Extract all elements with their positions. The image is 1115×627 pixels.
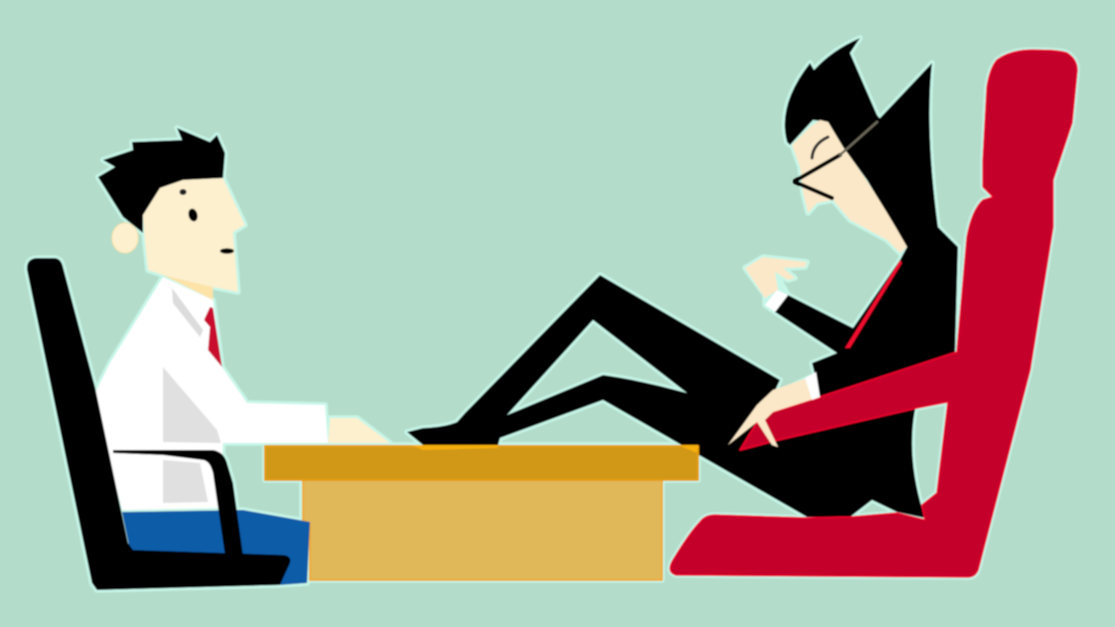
employee upper body and head — [93, 128, 390, 510]
devil boss body and legs — [407, 63, 958, 518]
employee chair armrest — [113, 450, 243, 555]
shirt collar shadow — [172, 288, 203, 337]
employee face — [143, 178, 245, 292]
desk base — [303, 480, 662, 580]
desk corner highlight — [678, 445, 698, 453]
employee chair back and seat — [27, 258, 290, 590]
employee ear — [112, 223, 138, 253]
desk — [265, 445, 698, 580]
employee neck — [163, 275, 213, 300]
devil eyebrow — [812, 137, 828, 158]
desk top highlight under shoe — [411, 445, 498, 450]
employee trousers — [122, 510, 310, 585]
employee hand — [328, 418, 390, 443]
devil lower cuff — [805, 372, 820, 400]
employee hair — [98, 128, 225, 233]
shirt shadow panel — [163, 367, 221, 503]
devil raised cuff — [765, 290, 788, 312]
red jacket lining — [845, 260, 902, 348]
devil raised hand — [745, 257, 807, 298]
red armchair — [670, 50, 1077, 577]
glasses — [795, 122, 877, 198]
desk top — [265, 446, 698, 480]
employee eye — [187, 208, 199, 222]
employee tie — [204, 307, 222, 367]
employee eyebrow — [180, 189, 186, 195]
devil hand on armrest — [728, 377, 820, 447]
employee mouth — [220, 248, 234, 254]
devil face — [792, 120, 907, 253]
devil hair — [785, 38, 885, 147]
employee shirt — [93, 277, 328, 510]
